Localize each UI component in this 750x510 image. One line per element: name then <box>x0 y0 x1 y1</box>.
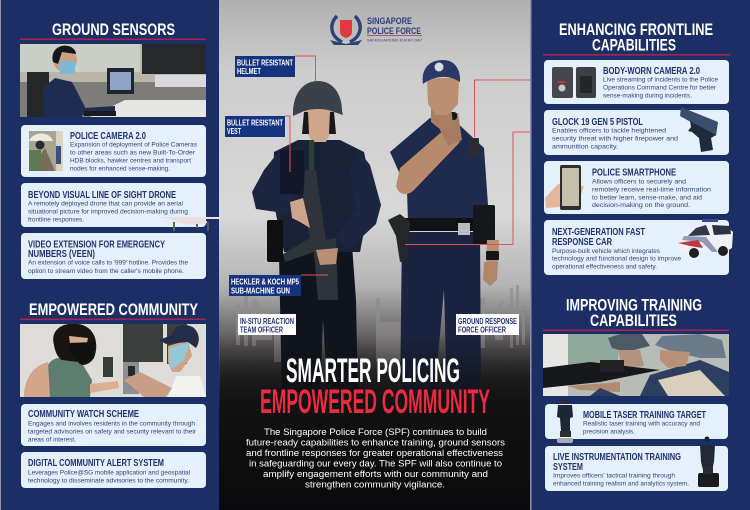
card: live instrumentation: LIVE INSTRUMENTATION TRAINING <box>553 452 681 463</box>
icon: body cameras <box>552 67 596 98</box>
shirt <box>390 118 488 222</box>
icon: taser target mannequin <box>557 398 573 443</box>
logo <box>330 16 422 45</box>
card: taser target: Realistic taser training with accuracy and <box>583 420 700 427</box>
label: in-situ officer: TEAM OFFICER <box>240 326 283 334</box>
legs <box>279 245 358 400</box>
card: community watch: COMMUNITY WATCH SCHEME <box>28 409 139 420</box>
card: taser target: precision analysis. <box>583 428 635 435</box>
label: helmet <box>235 56 295 77</box>
label: gun: SUB-MACHINE GUN <box>231 286 290 296</box>
heading: improving training capabilities: IMPROVING TRAINING <box>566 296 702 314</box>
label: in-situ officer: IN-SITU REACTION <box>240 317 294 326</box>
intro text: future-ready capabilities to enhance training, ground sensors <box>246 438 506 448</box>
label: vest: VEST <box>227 127 241 136</box>
torso <box>272 140 372 252</box>
cap badge <box>434 62 444 72</box>
card: live instrumentation: Improves officers' tactical training through <box>553 472 675 479</box>
card: drone: situational picture for improved decision-making during <box>28 208 188 215</box>
card: police camera 2.0: to other areas such as new Built-To-Order <box>70 149 196 156</box>
card: digital community alert: Leverages Police@SG mobile application and geospatial <box>28 469 190 476</box>
card: police camera 2.0: nodes for enhanced sense-making. <box>70 165 170 172</box>
skyline backdrop <box>236 285 525 362</box>
icon: pistol <box>680 107 718 152</box>
logo: POLICE FORCE <box>367 26 421 37</box>
card: smartphone: to better learn, sense-make, and aid <box>592 194 702 201</box>
card: drone: frontline responses. <box>28 216 84 223</box>
fade at feet <box>220 335 530 420</box>
helmet <box>293 81 343 116</box>
sling <box>309 140 314 210</box>
intro text: strengthen community vigilance. <box>305 480 445 490</box>
card: VEEN: An extension of voice calls to '999' hotline. Provides the <box>28 259 188 266</box>
support hand <box>316 248 338 265</box>
card: police camera 2.0: POLICE CAMERA 2.0 <box>70 131 146 142</box>
card: pistol <box>544 110 729 155</box>
card: police camera 2.0: HDB blocks, hawker centres and transport <box>70 157 191 164</box>
title: EMPOWERED COMMUNITY <box>260 383 490 421</box>
card: digital community alert: DIGITAL COMMUNITY ALERT SYSTEM <box>28 458 164 469</box>
card: community watch: Engages and involves residents in the community through <box>28 420 195 427</box>
card: drone: BEYOND VISUAL LINE OF SIGHT DRONE <box>28 190 176 201</box>
card: smartphone: POLICE SMARTPHONE <box>592 168 676 178</box>
holster <box>388 214 410 262</box>
card: VEEN: option to stream video from the caller's mobile phone. <box>28 268 184 275</box>
label: helmet: BULLET RESISTANT <box>237 58 293 68</box>
card: drone: A remotely deployed drone that can provide an aerial <box>28 200 183 207</box>
wordmark: SINGAPORE <box>367 16 412 27</box>
card: smartphone <box>544 161 729 214</box>
label: gun <box>229 275 301 296</box>
intro text <box>246 427 506 490</box>
logo: SAFEGUARDING EVERY DAY <box>367 38 422 42</box>
grip hand <box>290 198 310 228</box>
label: ground response officer: GROUND RESPONSE <box>458 317 517 326</box>
card: smartphone: Allows officers to securely and <box>592 178 686 185</box>
card: drone <box>21 183 206 227</box>
card: body-worn camera: Live streaming of incidents to the Police <box>603 77 718 84</box>
officer: in-situ reaction team <box>252 81 381 400</box>
legs <box>400 232 481 400</box>
panel: left column <box>0 0 220 510</box>
neck and face <box>304 104 334 142</box>
card: live instrumentation: enhanced training realism and analytics system. <box>553 480 689 487</box>
card: digital community alert: technology to disseminate advisories to the community. <box>28 477 189 484</box>
panel: right column <box>530 0 750 510</box>
photo: control room officer <box>20 44 206 117</box>
card: VEEN: VIDEO EXTENSION FOR EMERGENCY <box>28 240 165 250</box>
card: pistol: ammunition capacity. <box>552 143 618 150</box>
card: police camera 2.0: Expansion of deployment of Police Cameras <box>70 142 197 148</box>
label: ground response officer <box>456 314 519 335</box>
fist <box>483 262 498 286</box>
card: fast response car: RESPONSE CAR <box>552 237 612 248</box>
left sleeve <box>252 150 296 214</box>
photo: community officer and resident <box>20 324 206 397</box>
panel: centre background <box>218 0 532 510</box>
card: smartphone: decision-making on the ground. <box>592 202 690 209</box>
card: fast response car <box>544 220 729 275</box>
card: digital community alert <box>21 452 206 488</box>
card: fast response car: Purpose-built vehicle which integrates <box>552 248 660 255</box>
card: community watch: areas of interest. <box>28 436 76 443</box>
card: VEEN: NUMBERS (VEEN) <box>28 249 95 260</box>
title <box>260 352 490 421</box>
neck <box>431 105 453 130</box>
heading: empowered community: EMPOWERED COMMUNITY <box>29 300 198 319</box>
card: live instrumentation: SYSTEM <box>553 462 583 473</box>
card: pistol: security threat with higher firepower and <box>552 135 678 142</box>
card: fast response car: technology and functional design to improve <box>552 255 681 262</box>
card: community watch: targeted advisories on safety and security relevant to their <box>28 428 197 435</box>
face <box>427 78 459 115</box>
card: smartphone: remotely receive real-time information <box>592 186 711 193</box>
icon: training robot <box>698 436 719 487</box>
intro text: amplify engagement efforts with our community and <box>263 469 488 479</box>
badge <box>330 16 362 45</box>
card: body-worn camera: sense-making during incidents. <box>603 92 692 99</box>
belt <box>402 218 492 231</box>
buckle <box>458 223 470 235</box>
icon: hand with phone <box>545 165 584 210</box>
cap <box>423 60 460 84</box>
vest pouches <box>280 150 304 194</box>
card: community watch <box>21 404 206 446</box>
card: fast response car: operational effectiveness and safety. <box>552 263 657 270</box>
body camera <box>469 138 479 157</box>
card: pistol: Enables officers to tackle heightened <box>552 127 666 134</box>
right sleeve <box>336 150 381 250</box>
card: body-worn camera: BODY-WORN CAMERA 2.0 <box>603 66 700 77</box>
label: helmet: HELMET <box>237 67 261 76</box>
photo: police camera <box>29 131 63 171</box>
heading: improving training capabilities <box>566 296 702 330</box>
callout lines <box>285 56 544 275</box>
photo: tactical training <box>543 334 729 396</box>
watch <box>486 251 499 260</box>
label: gun: HECKLER & KOCH MP5 <box>231 278 299 286</box>
card: taser target <box>545 404 728 439</box>
label: vest: BULLET RESISTANT <box>227 118 283 128</box>
card: VEEN <box>21 233 206 279</box>
icon: police car <box>678 219 733 258</box>
intro text: The Singapore Police Force (SPF) continues to build <box>264 427 487 437</box>
intro text: and frontline responses for greater operational effectiveness <box>246 448 504 458</box>
heading: ground sensors: GROUND SENSORS <box>52 20 175 39</box>
officer: ground response force <box>388 60 499 400</box>
card: body-worn camera <box>544 60 729 104</box>
pouch <box>473 205 495 245</box>
card: body-worn camera: Operations Command Centre for better <box>603 84 717 92</box>
title: SMARTER POLICING <box>286 352 460 390</box>
chin strap <box>302 112 336 134</box>
intro text: in safeguarding our every day. The SPF will also continue to <box>249 458 502 468</box>
hand and radio <box>440 113 462 146</box>
gun <box>283 170 338 300</box>
label: vest <box>225 116 285 137</box>
card: pistol: GLOCK 19 GEN 5 PISTOL <box>552 117 643 128</box>
right forearm <box>486 240 499 264</box>
heading: enhancing frontline capabilities <box>559 20 713 54</box>
forearm raised <box>396 128 460 194</box>
heading: enhancing frontline capabilities: CAPABILITIES <box>592 36 676 54</box>
label: ground response officer: FORCE OFFICER <box>458 326 506 334</box>
holster <box>267 220 283 262</box>
icon: drone <box>159 217 220 231</box>
card: police camera 2.0 <box>21 125 206 177</box>
card: live instrumentation <box>545 446 728 491</box>
label: in-situ officer <box>238 314 296 335</box>
card: fast response car: NEXT-GENERATION FAST <box>552 227 645 238</box>
heading: improving training capabilities: CAPABILITIES <box>590 311 677 330</box>
